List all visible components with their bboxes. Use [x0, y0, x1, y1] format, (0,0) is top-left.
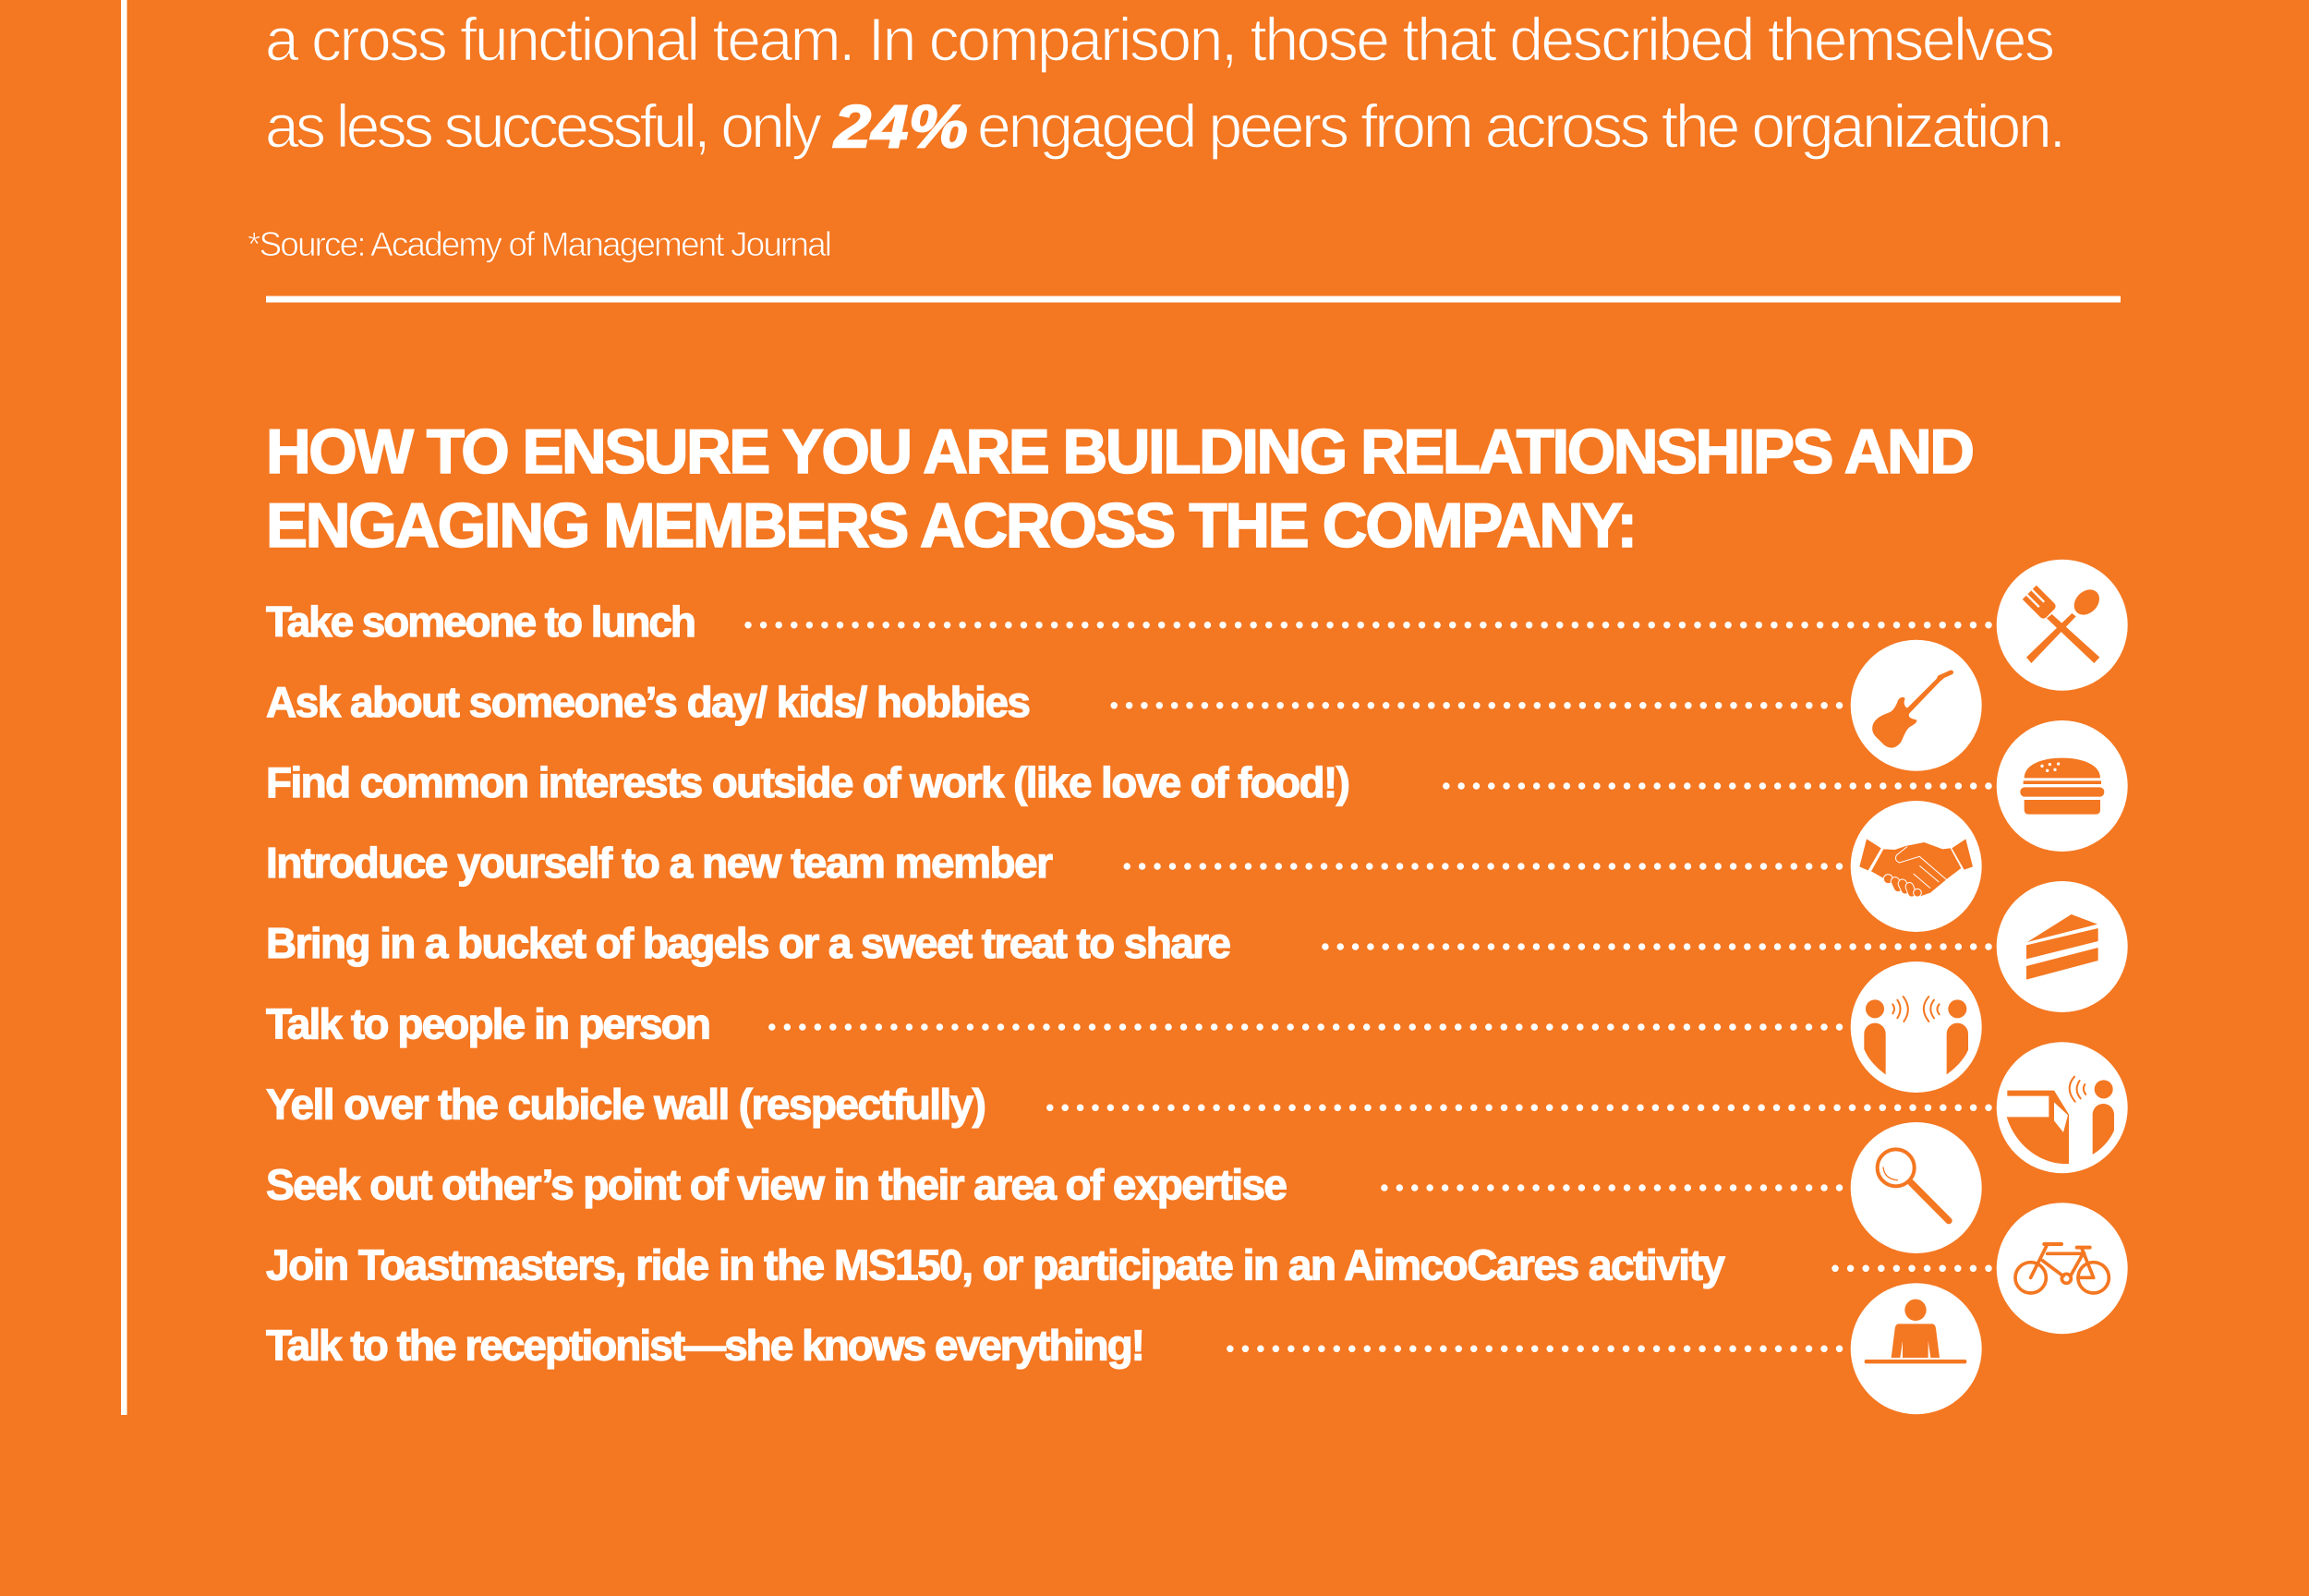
list row 1: lunch: [266, 560, 2128, 691]
icon: cake slice: [2026, 914, 2098, 980]
list row 7: cubicle wall: [266, 1042, 2128, 1173]
icon: bicycle: [2015, 1244, 2109, 1293]
list row 1: lunch: Take someone to lunch: [266, 598, 696, 646]
list row 10: receptionist: Talk to the receptionist—she knows everything!: [266, 1321, 1145, 1369]
icon: guitar: [1872, 671, 1953, 748]
list row 5: bagels: Bring in a bucket of bagels or a sweet treat to share: [266, 919, 1231, 967]
list row 3: common interests: [266, 720, 2128, 852]
intro text block: a cross functional team. In comparison, those that described themselves: [265, 6, 2055, 74]
icon: receptionist at desk: [1865, 1300, 1966, 1363]
heading: [266, 417, 1975, 561]
icon: person yelling over cubicle: [2007, 1077, 2114, 1164]
icon: fork and spoon: [2023, 585, 2104, 663]
list row 9: toastmasters: Join Toastmasters, ride in the MS150, or participate in an AimcoCares activity: [266, 1241, 1725, 1289]
list row 8: point of view: Seek out other’s point of view in their area of expertise: [266, 1160, 1287, 1208]
icon: burger: [2020, 758, 2104, 815]
intro text block: 24%: [832, 92, 968, 161]
heading: ENGAGING MEMBERS ACROSS THE COMPANY:: [266, 491, 1638, 561]
list row 7: cubicle wall: Yell over the cubicle wall (respectfully): [266, 1081, 986, 1129]
icon: magnifying glass: [1878, 1149, 1949, 1221]
source note: *Source: Academy of Management Journal: [248, 225, 832, 263]
list row 6: in person: [266, 961, 1982, 1093]
intro text block: engaged peers from across the organization.: [977, 92, 2066, 161]
icon: two people talking: [1864, 997, 1968, 1074]
list row 6: in person: Talk to people in person: [266, 999, 711, 1047]
icon: handshake: [1859, 839, 1973, 898]
list row 4: new team member: [266, 801, 1982, 932]
heading: HOW TO ENSURE YOU ARE BUILDING RELATIONSHIPS AND: [266, 417, 1975, 487]
list row 10: receptionist: [266, 1283, 1982, 1414]
list row 4: new team member: Introduce yourself to a new team member: [266, 839, 1053, 887]
vertical white rule at left: [121, 0, 127, 1415]
intro text block: as less successful, only: [265, 92, 822, 161]
list row 2: day, kids, hobbies: [266, 640, 1982, 771]
list row 3: common interests: Find common interests outside of work (like love of food!): [266, 758, 1350, 806]
list row 5: bagels: [266, 881, 2128, 1012]
list row 8: point of view: [266, 1122, 1982, 1253]
intro text block: [265, 6, 2066, 161]
horizontal divider: [266, 296, 2121, 303]
list row 9: toastmasters: [266, 1203, 2128, 1334]
list row 2: day, kids, hobbies: Ask about someone’s day/ kids/ hobbies: [266, 678, 1031, 726]
